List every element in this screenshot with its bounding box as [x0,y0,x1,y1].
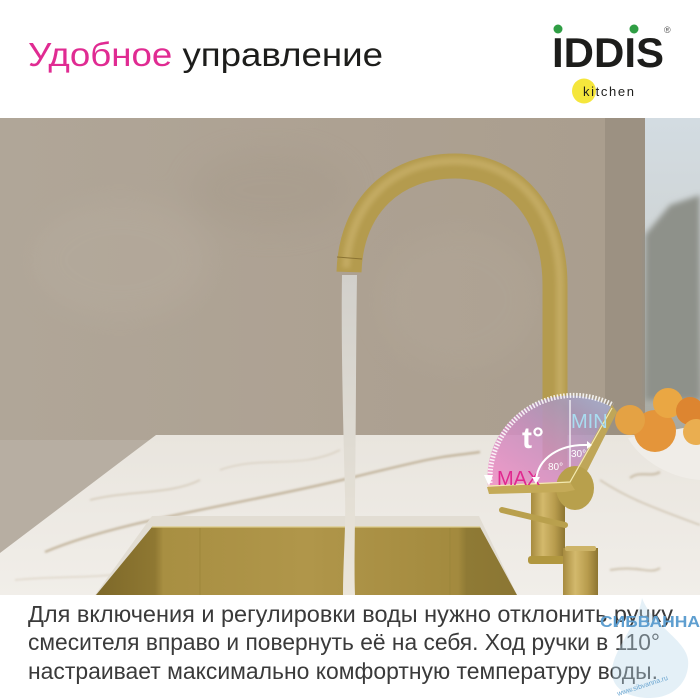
vertical divider [569,400,571,483]
window [605,118,700,448]
watermark drop and bath [612,598,688,698]
wall [0,118,700,448]
sink [95,516,517,595]
registered mark: ® [664,25,671,35]
watermark name: СИБВАННА [600,614,700,631]
temperature gauge [484,395,617,510]
lever gold arm [569,405,617,485]
faucet body [528,490,565,564]
arrow heads [484,441,592,486]
lower lever pin [502,510,565,525]
water stream [342,275,357,595]
faucet spout and column [337,161,560,470]
MAX label: MAX [497,468,540,490]
logo wordmark: IDDIS [552,29,664,76]
text panel background [0,595,700,700]
line 3: настраивает максимально комфортную температуру воды. [28,658,658,684]
marble countertop [0,435,700,595]
title: Удобное управление [28,37,383,74]
bowl of oranges [615,388,700,480]
30 degrees label: 30° [571,449,586,460]
left wall lower shade [0,440,160,555]
logo: IDDIS kitchen [552,24,671,104]
angle arc arrow [536,445,587,480]
watermark [600,598,700,698]
line 1: Для включения и регулировки воды нужно отклонить ручку [28,601,674,627]
watermark url: www.sibvanna.ru [616,675,669,698]
soap dispenser [563,546,598,595]
bottom gold arm [487,482,575,494]
logo green dots [554,24,638,34]
logo kitchen word: kitchen [583,84,634,99]
photo: kitchen scene [0,118,700,595]
gauge fan [487,395,613,487]
description text [28,601,674,684]
lever circle [556,466,594,510]
80 degrees label: 80° [548,462,563,473]
line 2: смесителя вправо и повернуть её на себя. Ход ручки в 110° [28,629,660,655]
t° label: t° [522,422,544,455]
logo yellow blob [572,78,596,104]
gauge scale ticks [490,395,613,483]
MIN label: MIN [571,411,608,433]
